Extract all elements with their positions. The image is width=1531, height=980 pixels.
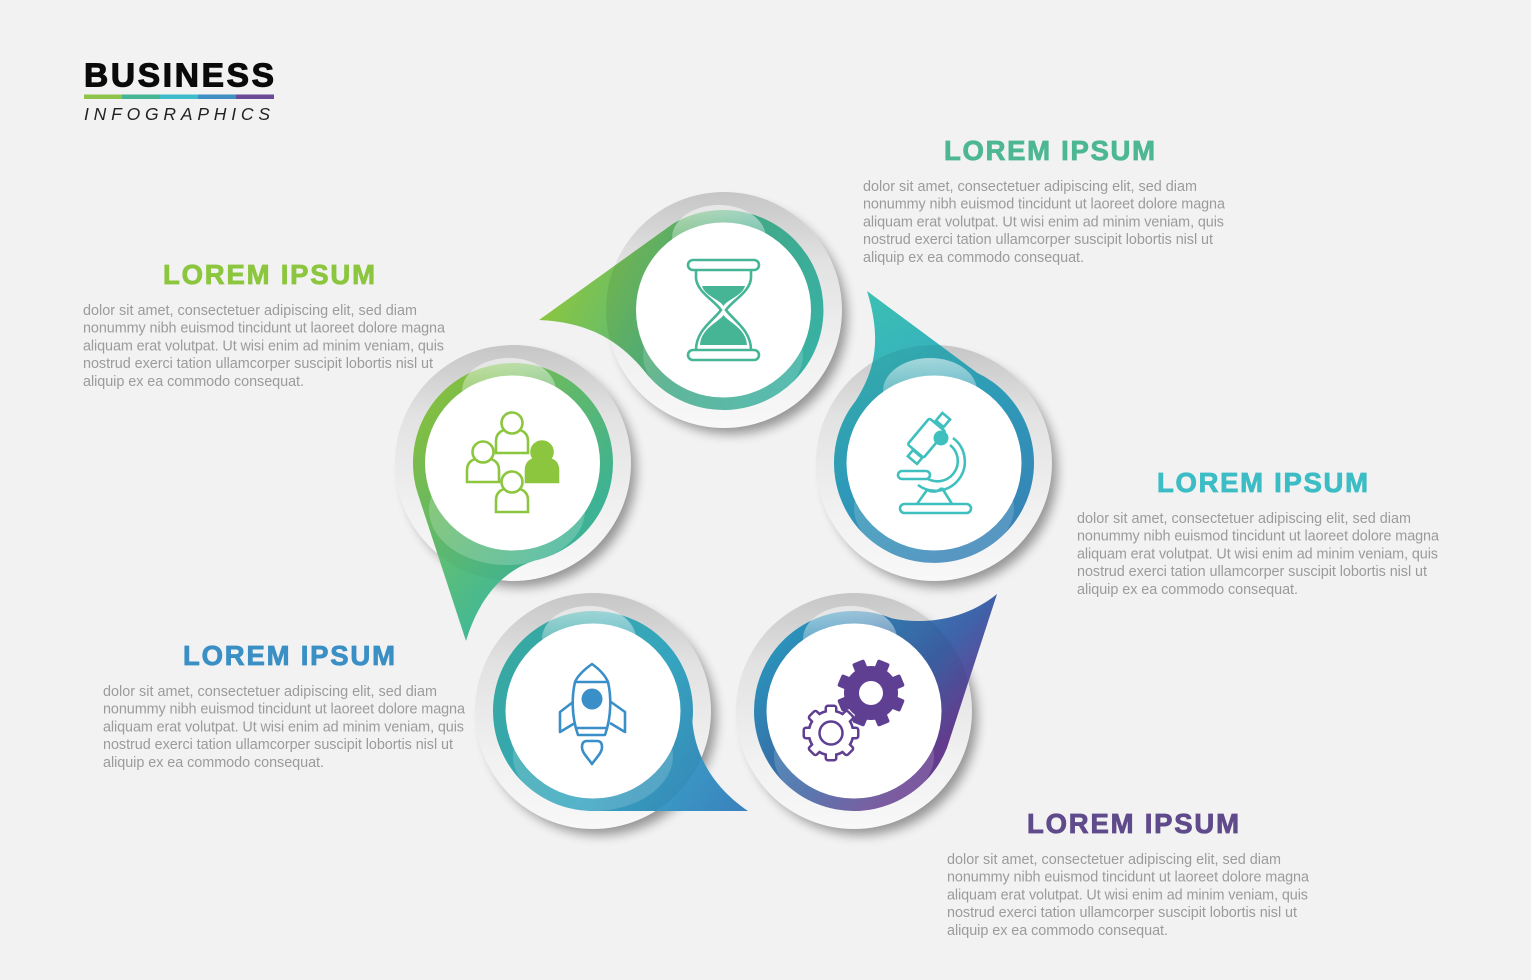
heading: bottom right: LOREM IPSUM (1027, 808, 1239, 839)
text block: bottom left: aliquip ex ea commodo consequat. (103, 755, 324, 771)
large solid gear (827, 649, 915, 737)
text block: bottom left: dolor sit amet, consectetuer adipiscing elit, sed diam (103, 684, 437, 700)
subtitle: infographics: INFOGRAPHICS (84, 104, 270, 124)
icon: microscope (898, 413, 971, 513)
text block: left: aliquip ex ea commodo consequat. (83, 374, 304, 390)
text block: top: aliquam erat volutpat. Ut wisi enim ad minim veniam, quis (863, 214, 1224, 230)
heading: left: LOREM IPSUM (163, 259, 375, 290)
heading: bottom left: LOREM IPSUM (183, 640, 395, 671)
text block: top: nonummy nibh euismod tincidunt ut laoreet dolore magna (863, 197, 1225, 213)
icon: rocket (560, 664, 625, 764)
text block: right (1077, 511, 1439, 598)
text block: left (83, 303, 445, 390)
node 5: people (395, 345, 636, 641)
text block: bottom left: nostrud exerci tation ullamcorper suscipit lobortis nisl ut (103, 737, 453, 753)
node 3: gears (736, 593, 997, 835)
title: business: BUSINESS (84, 58, 274, 94)
text block: bottom right: aliquam erat volutpat. Ut wisi enim ad minim veniam, quis (947, 887, 1308, 903)
text block: bottom right: aliquip ex ea commodo consequat. (947, 923, 1168, 939)
text block: bottom right: dolor sit amet, consectetuer adipiscing elit, sed diam (947, 852, 1281, 868)
text block: top (863, 179, 1225, 266)
icon: gears (805, 649, 915, 759)
text block: right: nostrud exerci tation ullamcorper suscipit lobortis nisl ut (1077, 564, 1427, 580)
text block: right: aliquam erat volutpat. Ut wisi enim ad minim veniam, quis (1077, 546, 1438, 562)
text block: bottom right: nostrud exerci tation ullamcorper suscipit lobortis nisl ut (947, 905, 1297, 921)
icon: hourglass (688, 260, 759, 360)
text block: bottom right (947, 852, 1309, 939)
text block: left: aliquam erat volutpat. Ut wisi enim ad minim veniam, quis (83, 338, 444, 354)
text block: bottom right: nonummy nibh euismod tincidunt ut laoreet dolore magna (947, 870, 1309, 886)
node 2: microscope (816, 291, 1057, 587)
text block: right: nonummy nibh euismod tincidunt ut laoreet dolore magna (1077, 529, 1439, 545)
text block: left: nonummy nibh euismod tincidunt ut laoreet dolore magna (83, 321, 445, 337)
text block: bottom left: aliquam erat volutpat. Ut wisi enim ad minim veniam, quis (103, 719, 464, 735)
text block: left: nostrud exerci tation ullamcorper suscipit lobortis nisl ut (83, 356, 433, 372)
heading: top: LOREM IPSUM (944, 135, 1155, 166)
text block: left: dolor sit amet, consectetuer adipiscing elit, sed diam (83, 303, 417, 319)
heading: right: LOREM IPSUM (1157, 467, 1368, 498)
text block: bottom left: nonummy nibh euismod tincidunt ut laoreet dolore magna (103, 702, 465, 718)
icon: people (467, 412, 558, 512)
text block: top: aliquip ex ea commodo consequat. (863, 250, 1084, 266)
node 1: hourglass (539, 192, 847, 434)
text block: top: dolor sit amet, consectetuer adipiscing elit, sed diam (863, 179, 1197, 195)
title block (84, 58, 274, 124)
text block: right: aliquip ex ea commodo consequat. (1077, 582, 1298, 598)
small outlined gear (805, 707, 857, 759)
text block: right: dolor sit amet, consectetuer adipiscing elit, sed diam (1077, 511, 1411, 527)
multicolour title bar (84, 94, 274, 99)
text block: top: nostrud exerci tation ullamcorper suscipit lobortis nisl ut (863, 232, 1213, 248)
node 4: rocket (475, 593, 748, 835)
text block: bottom left (103, 684, 465, 771)
